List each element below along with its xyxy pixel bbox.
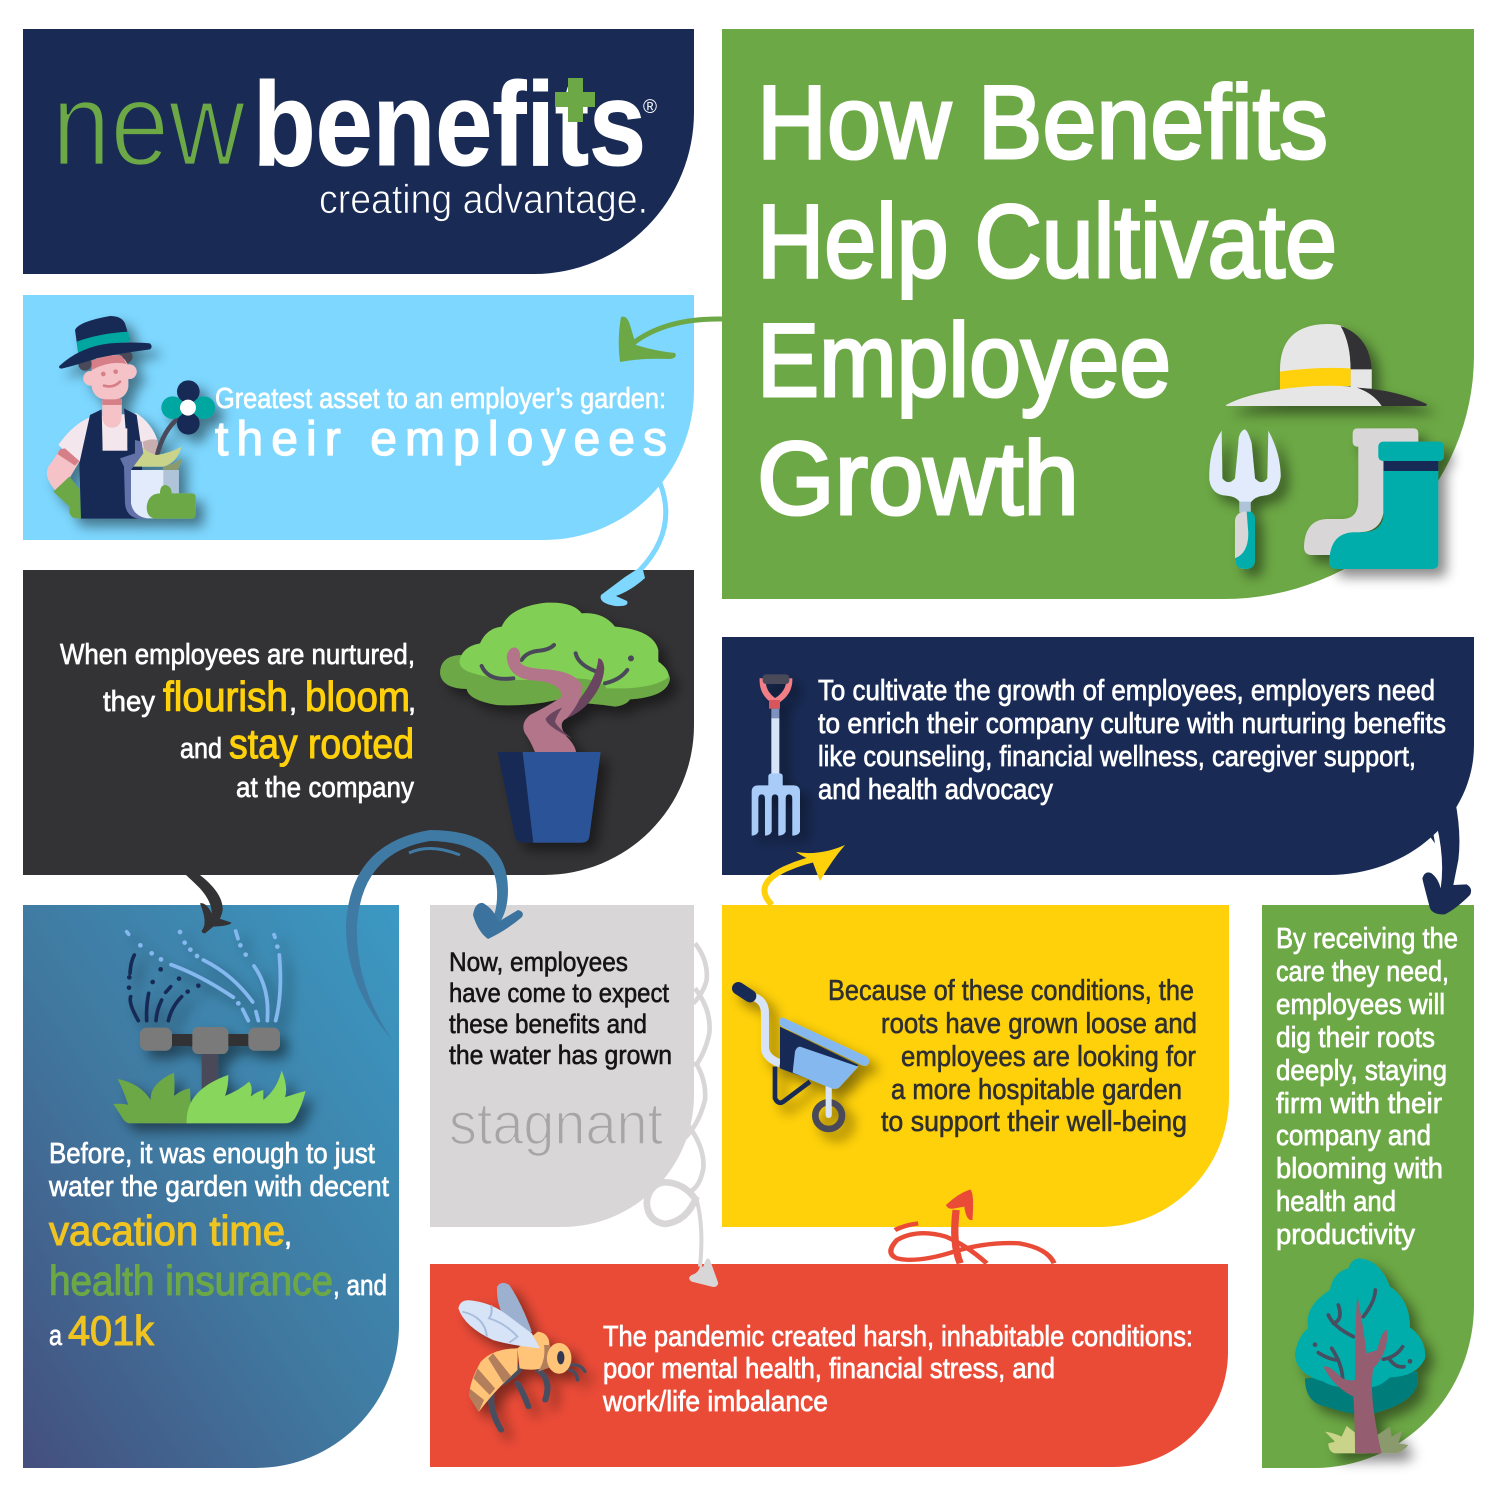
text: cultivate: To cultivate the growth of employees, employers need xyxy=(818,675,1435,707)
text: pandemic xyxy=(602,1321,1193,1418)
icon: sun hat xyxy=(1226,324,1427,406)
text: now employees xyxy=(449,947,672,1070)
title text: Help Cultivate xyxy=(757,184,1337,300)
logo word: benefits: benefits xyxy=(253,58,646,191)
text: now employees: these benefits and xyxy=(449,1009,647,1039)
arrow: blue panel to grey panel xyxy=(346,830,523,1040)
text: conditions: roots have grown loose and xyxy=(881,1008,1197,1040)
text: receiving care: firm with their xyxy=(1276,1088,1442,1120)
text: receiving care: dig their roots xyxy=(1276,1022,1435,1054)
arrow: dark panel to blue panel xyxy=(186,875,232,933)
text: conditions: employees are looking for xyxy=(901,1041,1196,1073)
logo plus sign xyxy=(555,78,595,122)
text: conditions xyxy=(828,975,1197,1138)
text: before xyxy=(48,1138,389,1354)
icon: pitchfork xyxy=(752,674,800,836)
text: cultivate: and health advocacy xyxy=(818,774,1053,806)
text: flourish bloom stay rooted: they xyxy=(103,686,155,718)
panel: receiving care xyxy=(1262,905,1474,1468)
panel: nurtured xyxy=(23,570,694,875)
arrow: navy panel to green panel xyxy=(1422,800,1471,914)
text: flourish bloom stay rooted: , xyxy=(408,686,416,718)
registered mark: ® xyxy=(643,97,657,118)
text: before: health insurance xyxy=(49,1257,333,1304)
text: flourish bloom stay rooted: stay rooted xyxy=(229,720,414,767)
text: flourish bloom stay rooted: bloom xyxy=(305,673,410,720)
text: pandemic: The pandemic created harsh, inhabitable conditions: xyxy=(603,1321,1193,1353)
text: conditions: to support their well-being xyxy=(881,1106,1187,1138)
text: pandemic: poor mental health, financial stress, and xyxy=(603,1353,1055,1385)
text: greatest asset: Greatest asset to an employer’s garden: xyxy=(215,383,666,415)
logo tagline: creating advantage. xyxy=(319,176,648,222)
icon: bee xyxy=(458,1283,585,1430)
icon: teal tree xyxy=(1295,1258,1425,1453)
text: before: Before, it was enough to just xyxy=(49,1138,375,1170)
icon: hand fork xyxy=(1209,429,1281,569)
text: receiving care: care they need, xyxy=(1276,956,1449,988)
panel: logo xyxy=(23,29,694,274)
text: flourish bloom stay rooted: at the company xyxy=(236,772,414,804)
icon: rubber boots xyxy=(1304,428,1444,569)
text: stagnant: stagnant xyxy=(449,1091,663,1157)
text: their employees: their employees xyxy=(215,413,667,466)
arrow: red panel to yellow panel xyxy=(891,1189,1054,1263)
panel: yellow conditions xyxy=(722,905,1229,1227)
text: conditions: Because of these conditions, the xyxy=(828,975,1194,1007)
text: now employees: the water has grown xyxy=(449,1040,672,1070)
text: receiving care: deeply, staying xyxy=(1276,1055,1447,1087)
arrow: light blue to dark panel xyxy=(601,483,666,606)
panel: greatest asset xyxy=(23,295,694,540)
text: receiving care: employees will xyxy=(1276,989,1445,1021)
title text: How Benefits xyxy=(757,65,1328,181)
arrow: yellow panel to navy panel xyxy=(764,845,845,905)
icon: bonsai tree xyxy=(440,603,670,843)
icon: gardener with plant xyxy=(47,316,215,519)
arrow: grey panel squiggle to red panel xyxy=(647,943,718,1287)
text: pandemic: work/life imbalance xyxy=(602,1386,828,1418)
panel: now xyxy=(430,905,694,1227)
title text xyxy=(757,65,1337,537)
text: now employees: Now, employees xyxy=(449,947,628,977)
panel: before xyxy=(23,905,399,1468)
logo word: new: new xyxy=(52,58,246,191)
text: before: water the garden with decent xyxy=(48,1171,389,1203)
text: cultivate: like counseling, financial wellness, caregiver support, xyxy=(818,741,1416,773)
text: now employees: have come to expect xyxy=(449,978,669,1008)
text: flourish bloom stay rooted: When employees are nurtured, xyxy=(60,639,415,671)
panel: pandemic xyxy=(430,1264,1228,1467)
text: before: a xyxy=(49,1320,63,1352)
text: flourish bloom stay rooted xyxy=(60,639,416,804)
title text: Employee xyxy=(757,303,1171,419)
text: receiving care: company and xyxy=(1276,1120,1431,1152)
text: cultivate: to enrich their company culture with nurturing benefits xyxy=(818,708,1446,740)
text: receiving care: productivity xyxy=(1276,1219,1415,1251)
text: before: 401k xyxy=(68,1307,155,1354)
text: conditions: a more hospitable garden xyxy=(891,1074,1182,1106)
text: before: , xyxy=(284,1220,292,1252)
panel: title xyxy=(722,29,1474,599)
text: flourish bloom stay rooted: flourish xyxy=(163,673,288,720)
text: receiving care: By receiving the xyxy=(1276,923,1458,955)
text: receiving care: blooming with xyxy=(1276,1153,1443,1185)
title text: Growth xyxy=(757,421,1079,537)
text: flourish bloom stay rooted: , xyxy=(289,686,297,718)
icon: wheelbarrow xyxy=(738,988,869,1129)
text: flourish bloom stay rooted: and xyxy=(180,733,222,765)
arrow: green to light blue panel xyxy=(619,317,722,362)
text: cultivate xyxy=(818,675,1446,806)
icon: sprinkler and grass xyxy=(113,931,306,1123)
text: before: vacation time xyxy=(49,1207,285,1254)
text: receiving care xyxy=(1276,923,1458,1251)
text: before: , and xyxy=(333,1270,387,1302)
text: receiving care: health and xyxy=(1276,1186,1396,1218)
panel: cultivate xyxy=(722,637,1474,875)
